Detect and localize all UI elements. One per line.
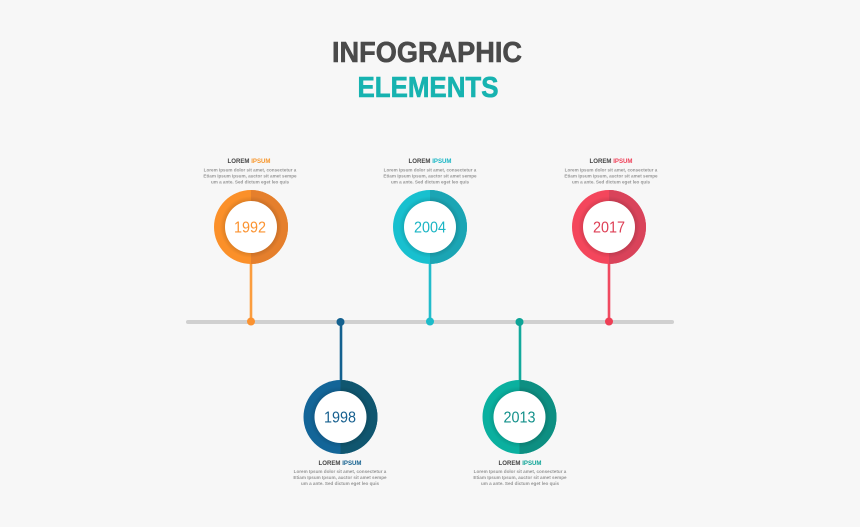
connector: 2013 bbox=[516, 318, 524, 382]
text block: 2004 caption: um a ante. Sed dictum eget leo quis bbox=[391, 180, 469, 184]
text block: 2004 caption: LOREM IPSUM bbox=[408, 158, 452, 165]
text block: 2004 caption: Lorem Ipsum dolor sit amet, consectetur a bbox=[384, 168, 477, 172]
text block: 1992 caption: um a ante. Sed dictum eget leo quis bbox=[211, 180, 289, 184]
text block: 2013 caption bbox=[473, 460, 567, 486]
badge: 1992 bbox=[214, 190, 288, 264]
connector: 1992 bbox=[247, 262, 255, 326]
text block: 2013 caption: Lorem Ipsum dolor sit amet, consectetur a bbox=[474, 469, 567, 474]
text block: 2017 caption: Lorem Ipsum dolor sit amet, consectetur a bbox=[565, 168, 658, 172]
milestone: 2017 bbox=[564, 158, 658, 326]
title bbox=[332, 37, 522, 104]
milestone: 1992 bbox=[203, 158, 297, 326]
badge: 1998: 1998 bbox=[324, 410, 356, 426]
text block: 2017 caption: LOREM IPSUM bbox=[589, 158, 633, 165]
milestone: 2004 bbox=[383, 158, 477, 326]
text block: 1998 caption: Etiam Ipsum Ipsum, auctor sit amet sempe bbox=[293, 475, 387, 480]
connector: 2004 bbox=[426, 262, 434, 326]
badge: 2013: 2013 bbox=[504, 410, 536, 426]
text block: 2004 caption: Etiam Ipsum Ipsum, auctor sit amet sempe bbox=[383, 174, 477, 178]
badge: 1998 bbox=[304, 380, 378, 454]
badge: 2017 bbox=[572, 190, 646, 264]
badge: 2017: 2017 bbox=[593, 220, 625, 236]
text block: 1992 caption bbox=[203, 158, 297, 184]
badge: 1992: 1992 bbox=[234, 220, 266, 236]
text block: 1998 caption: Lorem Ipsum dolor sit amet, consectetur a bbox=[294, 469, 387, 474]
text block: 2004 caption bbox=[383, 158, 477, 184]
milestone: 1998 bbox=[293, 318, 387, 486]
text block: 2017 caption: um a ante. Sed dictum eget leo quis bbox=[572, 180, 650, 184]
title: ELEMENTS bbox=[358, 72, 498, 104]
text block: 2013 caption: um a ante. Sed dictum eget leo quis bbox=[481, 481, 559, 486]
connector: 1998 bbox=[336, 318, 344, 382]
text block: 1992 caption: Etiam Ipsum Ipsum, auctor sit amet sempe bbox=[203, 174, 297, 178]
timeline axis bbox=[186, 320, 674, 324]
text block: 1998 caption: LOREM IPSUM bbox=[318, 460, 362, 467]
text block: 2017 caption: Etiam Ipsum Ipsum, auctor sit amet sempe bbox=[564, 174, 658, 178]
text block: 1992 caption: LOREM IPSUM bbox=[227, 158, 271, 165]
badge: 2004 bbox=[393, 190, 467, 264]
text block: 2017 caption bbox=[564, 158, 658, 184]
text block: 1998 caption bbox=[293, 460, 387, 486]
connector: 2017 bbox=[605, 262, 613, 326]
text block: 1998 caption: um a ante. Sed dictum eget leo quis bbox=[301, 481, 379, 486]
milestone: 2013 bbox=[473, 318, 567, 486]
text block: 2013 caption: LOREM IPSUM bbox=[498, 460, 542, 467]
text block: 2013 caption: Etiam Ipsum Ipsum, auctor sit amet sempe bbox=[473, 475, 567, 480]
badge: 2004: 2004 bbox=[414, 220, 446, 236]
title: INFOGRAPHIC bbox=[332, 37, 522, 69]
text block: 1992 caption: Lorem Ipsum dolor sit amet, consectetur a bbox=[204, 168, 297, 172]
badge: 2013 bbox=[482, 380, 556, 454]
